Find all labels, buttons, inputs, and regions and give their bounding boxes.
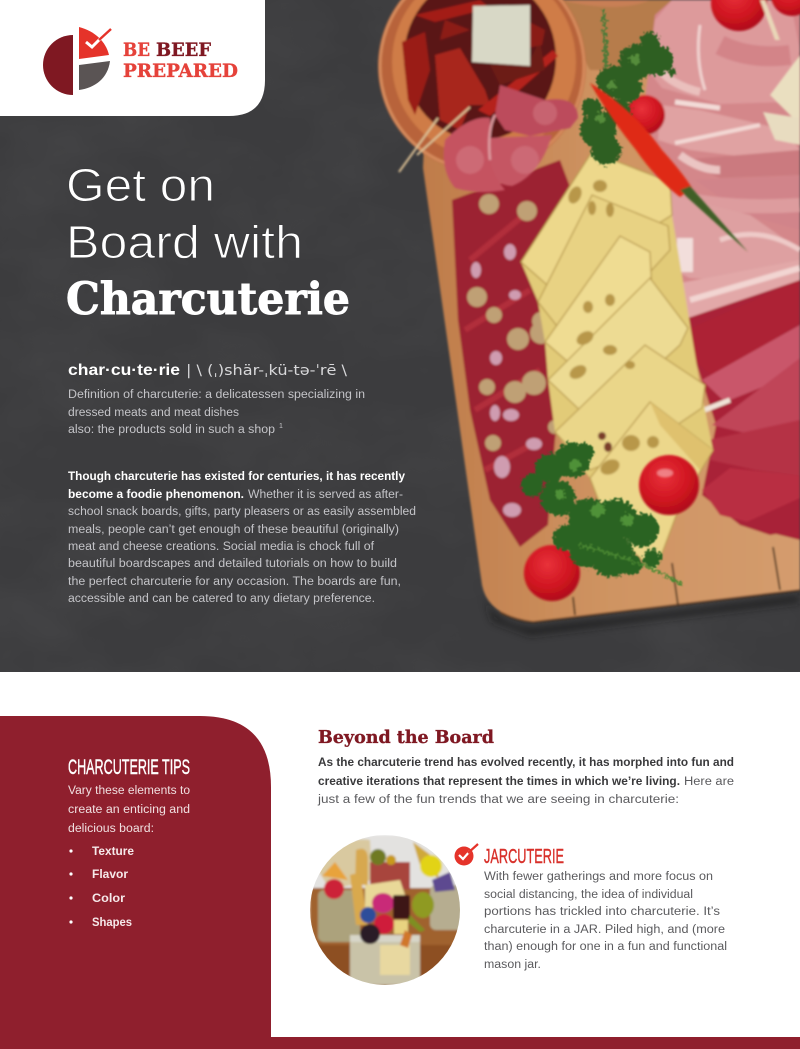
intro paragraph: become a foodie phenomenon. [68,489,244,501]
toothpicks [399,107,470,172]
beyond the board text: As the charcuterie trend has evolved recently, it has morphed into fun and [318,757,734,769]
cheese slices [521,152,713,572]
tomatoes top [711,0,767,31]
tips intro: delicious board: [68,823,154,835]
tips list: Texture [92,846,134,858]
tips list [69,846,134,929]
beyond the board text: Here are [684,776,734,788]
intro paragraph: the perfect charcuterie for any occasion. The boards are fun, [68,576,401,588]
definition block: also: the products sold in such a shop [68,424,275,436]
red chili [590,83,692,197]
logo text: BEEF [156,39,211,61]
jarcuterie text: charcuterie in a JAR. Piled high, and (more [484,924,725,936]
wooden board [423,0,800,622]
jarcuterie text: social distancing, the idea of individual [484,889,693,901]
logo text: PREPARED [123,60,238,82]
parmesan right [770,55,800,125]
beyond the board text [317,757,734,806]
panel: charcuterie tips [0,716,271,1037]
jarcuterie text: With fewer gatherings and more focus on [484,871,713,883]
beyond the board text: creative iterations that represent the times in which we’re living. [318,776,680,788]
tips heading: CHARCUTERIE TIPS [68,756,190,779]
bowl with dried tomatoes [378,0,586,192]
logo text: BE [123,39,150,61]
parsley bottom [521,442,683,585]
bottom band [0,1037,800,1049]
heading: beyond the board: Beyond the Board [318,727,494,748]
definition block: 1 [279,423,283,430]
tips intro: create an enticing and [68,804,190,816]
definition block: char·cu·te·rie [68,362,180,379]
hero background: dark slate [0,0,800,672]
jarcuterie text: mason jar. [484,959,541,971]
tomato behind chili [625,95,665,135]
title: Get on [66,159,215,211]
intro paragraph: Whether it is served as after- [248,489,403,501]
tips intro: Vary these elements to [68,785,190,797]
ham slices [645,0,800,330]
parsley top [580,10,676,165]
tips list: Shapes [92,917,132,929]
intro paragraph [68,471,416,605]
salami slices [495,85,578,136]
intro paragraph: school snack boards, gifts, party pleasers or as easily assembled [68,506,416,518]
definition block [68,362,365,436]
tips list: Color [92,893,126,905]
heading: jarcuterie: JARCUTERIE [484,846,564,868]
definition block: | \ (ˌ)shär-ˌkü-tə-ˈrē \ [186,363,347,379]
tomato on board [524,545,580,601]
photo: charcuterie board [378,0,800,636]
beef slices [682,280,800,540]
salami [452,160,575,547]
intro paragraph: meat and cheese creations. Social media is chock full of [68,541,375,553]
tips list: Flavor [92,869,129,881]
intro paragraph: Though charcuterie has existed for centuries, it has recently [68,471,406,483]
title [66,159,350,325]
title: Board with [66,216,303,268]
parmesan shard [472,5,530,66]
title: Charcuterie [66,274,350,325]
tips intro [68,785,190,835]
logo mark [43,27,111,95]
jarcuterie text [484,871,727,971]
jarcuterie text: than) enough for one in a fun and functional [484,941,727,953]
beyond the board text: just a few of the fun trends that we are seeing in charcuterie: [317,794,679,806]
intro paragraph: meals, people can’t get enough of these beautiful (originally) [68,524,399,536]
definition block: Definition of charcuterie: a delicatessen specializing in [68,389,365,401]
definition block: dressed meats and meat dishes [68,407,239,419]
panel: logo [0,0,265,116]
intro paragraph: accessible and can be catered to any dietary preference. [68,593,375,605]
logo text [123,39,238,82]
intro paragraph: beautiful boardscapes and detailed tutorials on how to build [68,558,397,570]
jarcuterie text: portions has trickled into charcuterie. It’s [484,906,720,918]
icon: red check badge [454,844,478,866]
tomato on cheese [639,455,699,515]
photo: jars [310,835,462,990]
